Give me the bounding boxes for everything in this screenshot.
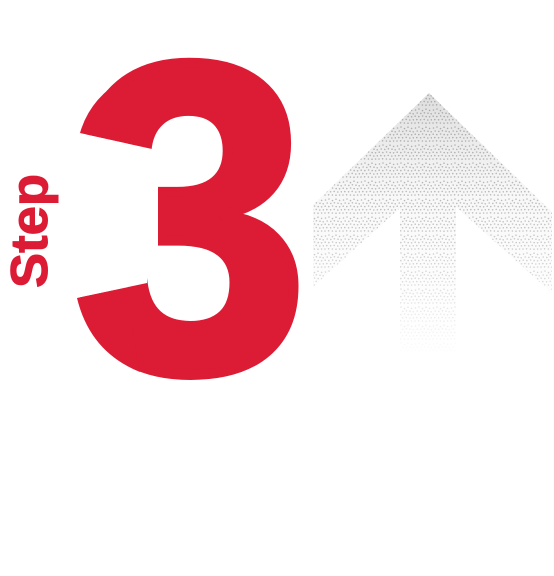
icon: stippled up arrow	[313, 93, 552, 352]
label: Step: Step	[1, 174, 59, 288]
